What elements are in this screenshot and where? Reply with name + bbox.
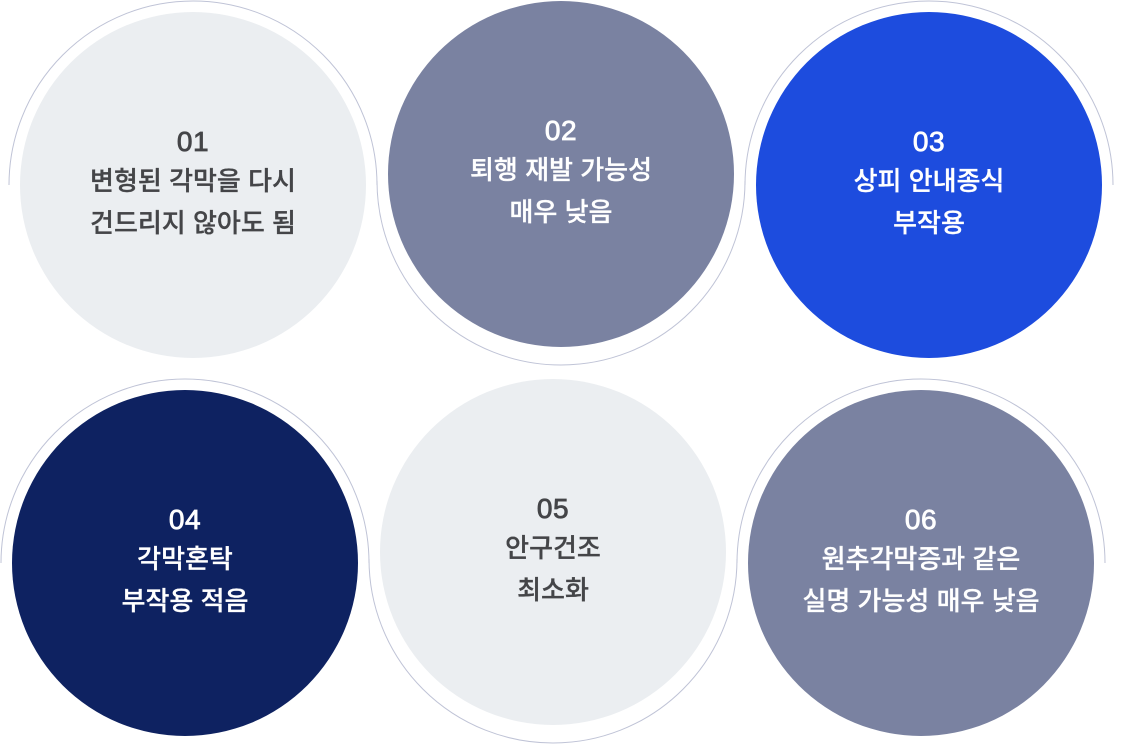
number 01: 01 bbox=[177, 126, 209, 157]
panel: 05 bbox=[380, 379, 726, 725]
text 04 line 1: 각막혼탁 bbox=[137, 539, 233, 576]
connector line: top row bbox=[9, 1, 1113, 365]
text 06 line 2: 실명 가능성 매우 낮음 bbox=[802, 581, 1040, 618]
text 01 line 2: 건드리지 않아도 됨 bbox=[90, 203, 296, 240]
circle 06 bbox=[748, 390, 1094, 736]
text 03 line 1: 상피 안내종식 bbox=[854, 161, 1004, 198]
panel: 03 bbox=[756, 12, 1102, 358]
circle 05 bbox=[380, 379, 726, 725]
number 03: 03 bbox=[913, 126, 945, 157]
text 03 line 2: 부작용 bbox=[893, 203, 965, 240]
circle 03 bbox=[756, 12, 1102, 358]
panel: 04 bbox=[12, 390, 358, 736]
text 01 line 1: 변형된 각막을 다시 bbox=[90, 161, 296, 198]
text 04 line 2: 부작용 적음 bbox=[122, 581, 248, 618]
circle 01 bbox=[20, 12, 366, 358]
number 04: 04 bbox=[169, 504, 201, 535]
number 05: 05 bbox=[537, 493, 569, 524]
text 05 line 2: 최소화 bbox=[517, 570, 589, 607]
panel: 01 bbox=[20, 12, 366, 358]
circle 04 bbox=[12, 390, 358, 736]
text 02 line 2: 매우 낮음 bbox=[510, 192, 612, 229]
connector line: bottom row bbox=[1, 379, 1105, 743]
panel: 02 bbox=[388, 1, 734, 347]
text 05 line 1: 안구건조 bbox=[505, 528, 601, 565]
text 06 line 1: 원추각막증과 같은 bbox=[822, 539, 1020, 576]
number 06: 06 bbox=[905, 504, 937, 535]
number 02: 02 bbox=[545, 115, 577, 146]
panel: 06 bbox=[748, 390, 1094, 736]
circle 02 bbox=[388, 1, 734, 347]
text 02 line 1: 퇴행 재발 가능성 bbox=[470, 150, 652, 187]
